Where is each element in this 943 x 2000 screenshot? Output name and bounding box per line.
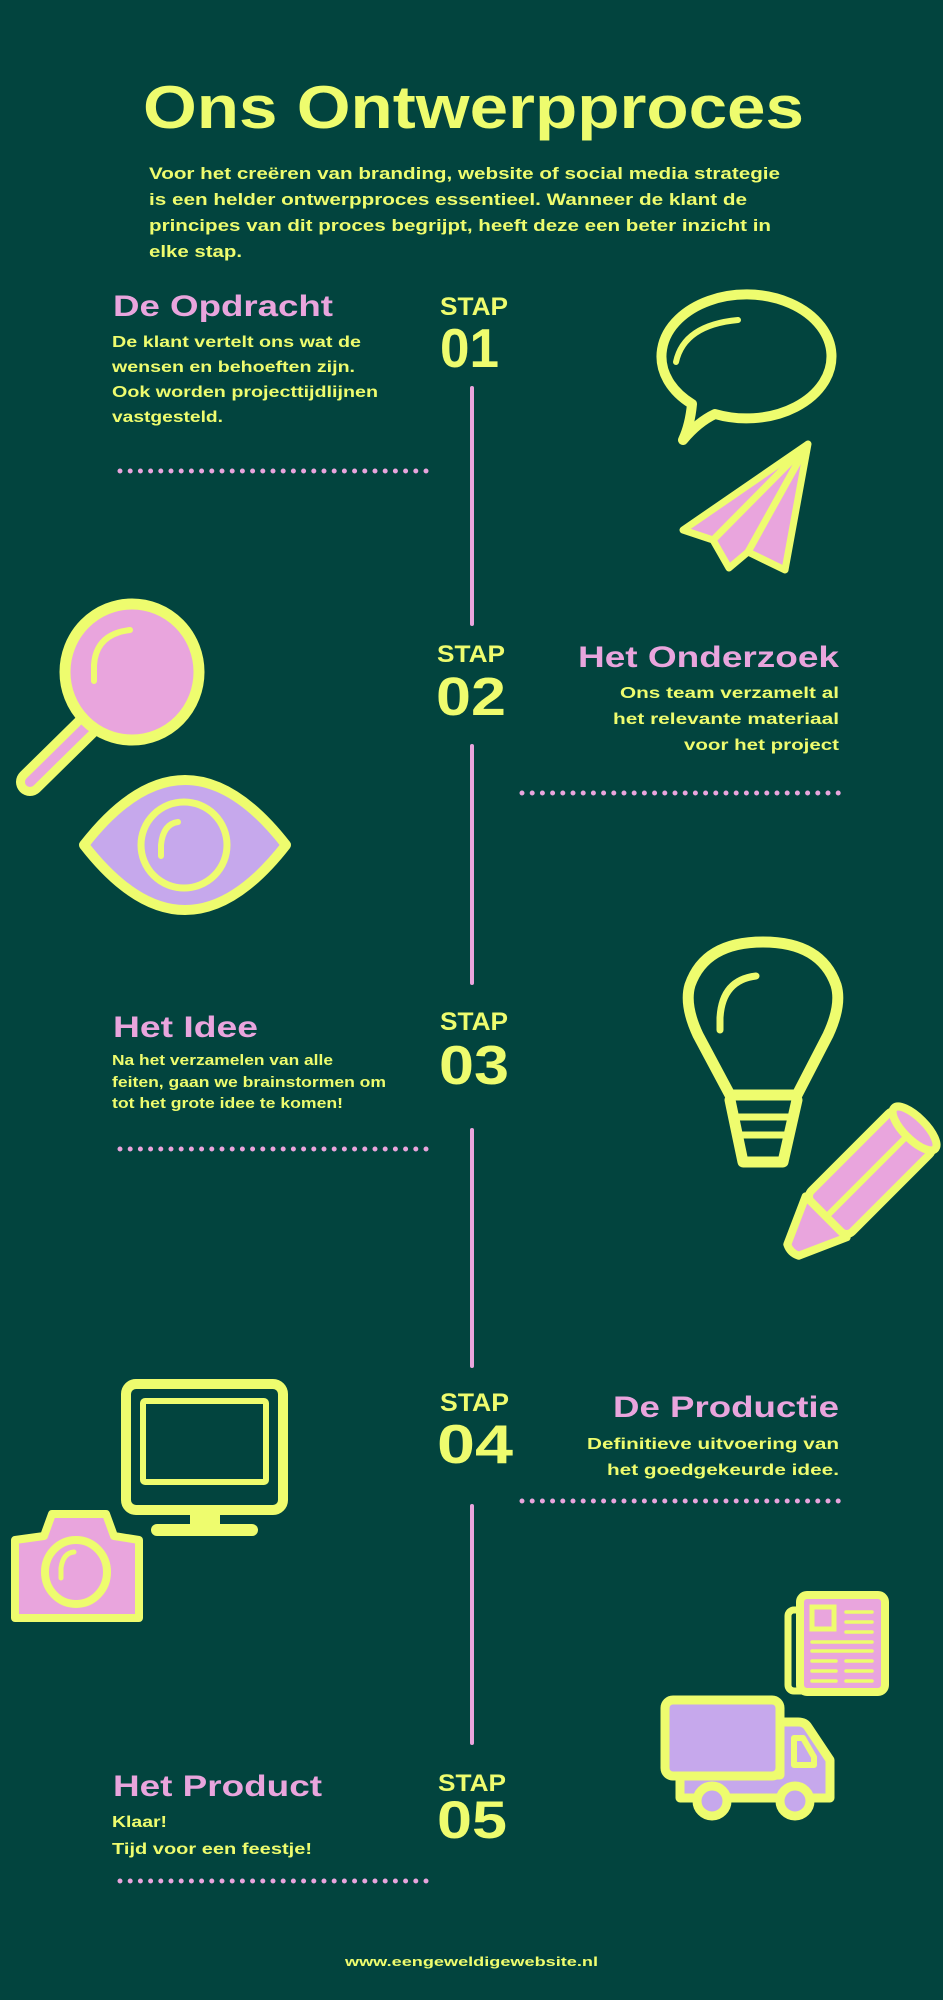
intro text: principes van dit proces begrijpt, heeft deze een beter inzicht in xyxy=(149,216,771,235)
step 5 label: 05 xyxy=(437,1791,507,1850)
icon: eye xyxy=(84,780,286,910)
step 1 text: De klant vertelt ons wat de xyxy=(112,334,361,351)
step 2 text xyxy=(522,641,840,793)
icon: paper plane xyxy=(683,444,808,570)
step 1 label: 01 xyxy=(440,317,499,379)
icon: newspaper xyxy=(788,1595,885,1692)
step 1 text: vastgesteld. xyxy=(112,409,223,426)
step 3 label: 03 xyxy=(439,1034,509,1096)
step 5 text xyxy=(112,1770,435,1881)
footer url: www.eengeweldigewebsite.nl xyxy=(344,1954,598,1969)
icon: delivery truck xyxy=(665,1700,830,1816)
step 1 label: STAP xyxy=(440,293,508,321)
intro text: Voor het creëren van branding, website of social media strategie xyxy=(149,164,780,183)
step 3 text: tot het grote idee te komen! xyxy=(112,1095,343,1112)
timeline segments xyxy=(470,388,474,1743)
step 4 label: 04 xyxy=(437,1413,513,1475)
step 5 text: Tijd voor een feestje! xyxy=(112,1841,312,1858)
step 5 label xyxy=(437,1770,507,1850)
step 2 label: 02 xyxy=(436,667,506,727)
icon: light bulb xyxy=(688,942,838,1162)
icon: magnifying glass xyxy=(30,604,199,782)
step 1 text: wensen en behoeften zijn. xyxy=(111,359,355,376)
step 3 text xyxy=(112,1011,435,1149)
step 2 text: voor het project xyxy=(684,737,840,754)
step 2 text: Ons team verzamelt al xyxy=(620,685,839,702)
intro text: is een helder ontwerpproces essentieel. Wanneer de klant de xyxy=(149,190,747,209)
intro text: elke stap. xyxy=(149,242,242,261)
step 5 text: Het Product xyxy=(113,1770,322,1803)
step 3 label xyxy=(439,1008,509,1096)
icon: monitor xyxy=(126,1384,283,1530)
step 1 label xyxy=(440,293,508,379)
step 3 text: Na het verzamelen van alle xyxy=(112,1052,333,1069)
step 4 text: De Productie xyxy=(613,1391,839,1424)
intro text xyxy=(149,164,780,261)
icon: speech bubble xyxy=(661,294,831,440)
step 4 label: STAP xyxy=(440,1389,509,1417)
icon: camera xyxy=(15,1514,139,1618)
step 2 text: het relevante materiaal xyxy=(613,711,839,728)
step 2 text: Het Onderzoek xyxy=(578,641,839,674)
step 3 text: feiten, gaan we brainstormen om xyxy=(112,1074,386,1091)
step 1 text: De Opdracht xyxy=(113,290,333,323)
step 1 text: Ook worden projecttijdlijnen xyxy=(112,384,378,401)
step 2 label xyxy=(436,641,506,727)
step 5 text: Klaar! xyxy=(112,1814,167,1831)
step 4 text: het goedgekeurde idee. xyxy=(607,1462,839,1479)
step 2 label: STAP xyxy=(437,641,505,668)
title: Ons Ontwerpproces xyxy=(143,74,804,141)
step 4 label xyxy=(437,1389,513,1475)
step 5 label: STAP xyxy=(438,1770,506,1797)
step 3 text: Het Idee xyxy=(113,1011,258,1044)
icon: pencil xyxy=(771,1100,943,1272)
step 4 text: Definitieve uitvoering van xyxy=(587,1436,839,1453)
step 4 text xyxy=(522,1391,839,1501)
step 3 label: STAP xyxy=(440,1008,508,1036)
step 1 text xyxy=(111,290,435,471)
